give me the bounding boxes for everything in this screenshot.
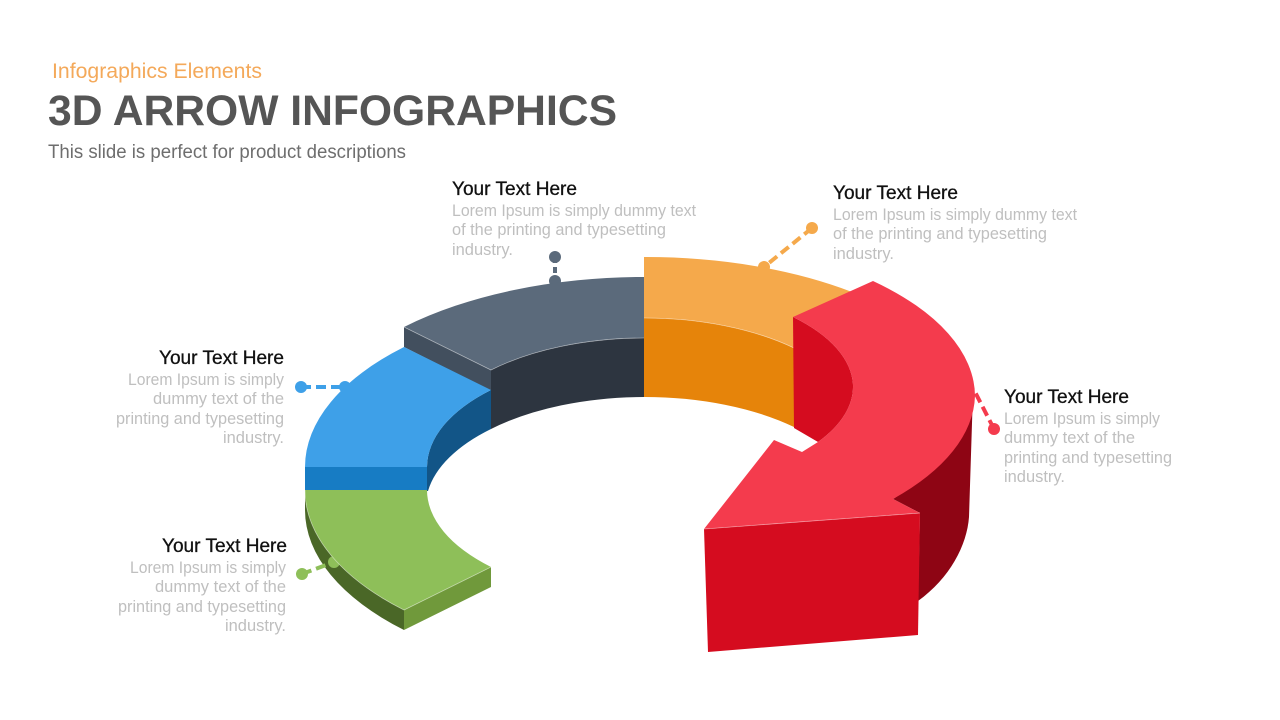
- subtitle: This slide is perfect for product descriptions: [48, 142, 406, 163]
- red inner wall: [793, 317, 853, 442]
- callout: blue: [116, 348, 285, 447]
- callout: green: dummy text of the: [155, 578, 286, 596]
- callout: orange: [833, 183, 1077, 263]
- blue top: [305, 347, 491, 467]
- leader: slate: [549, 251, 561, 287]
- callout: slate: industry.: [452, 241, 513, 259]
- callout: slate: Lorem Ipsum is simply dummy text: [452, 202, 696, 220]
- segment: red arrow: [704, 281, 975, 652]
- callout: blue: Your Text Here: [159, 348, 284, 369]
- header: [48, 60, 617, 163]
- callout: blue: Lorem Ipsum is simply: [128, 371, 285, 389]
- red outer wall: [893, 392, 973, 601]
- slate inner wall: [491, 338, 644, 429]
- callout: blue: printing and typesetting: [116, 410, 284, 428]
- green end face: [404, 567, 491, 630]
- callout: green: Lorem Ipsum is simply: [130, 559, 287, 577]
- segment: blue: [305, 347, 491, 491]
- title: 3D ARROW INFOGRAPHICS: [48, 87, 617, 135]
- callout: slate: Your Text Here: [452, 179, 577, 200]
- orange top: [644, 257, 852, 348]
- red arrow front face: [704, 513, 920, 652]
- callout: green: industry.: [225, 617, 286, 635]
- slate end face: [404, 327, 491, 391]
- callout: orange: Lorem Ipsum is simply dummy text: [833, 206, 1077, 224]
- slate top: [404, 277, 644, 370]
- segment: orange: [644, 257, 852, 427]
- leader: red: [974, 390, 1000, 435]
- callout: red: Your Text Here: [1004, 387, 1129, 408]
- blue front band: [305, 467, 427, 490]
- callout: orange: Your Text Here: [833, 183, 958, 204]
- callout: slate: of the printing and typesetting: [452, 221, 666, 239]
- green top: [305, 490, 491, 610]
- callout: green: Your Text Here: [162, 536, 287, 557]
- segment: green: [296, 490, 491, 630]
- orange inner wall: [644, 318, 794, 427]
- green outer wall: [305, 490, 404, 630]
- eyebrow: Infographics Elements: [52, 60, 262, 83]
- callout: red: Lorem Ipsum is simply: [1004, 410, 1161, 428]
- callout: red: dummy text of the: [1004, 429, 1135, 447]
- segment: slate: [404, 277, 644, 429]
- callout: red: printing and typesetting: [1004, 449, 1172, 467]
- leader: green: [296, 556, 340, 580]
- leader: orange: [758, 222, 818, 273]
- callout: red: [1004, 387, 1172, 486]
- leader: blue: [295, 381, 351, 393]
- callout: blue: dummy text of the: [153, 390, 284, 408]
- blue inner wall: [427, 390, 491, 491]
- callout: green: printing and typesetting: [118, 598, 286, 616]
- red arrow top: [704, 281, 975, 529]
- callout: orange: of the printing and typesetting: [833, 225, 1047, 243]
- callout: red: industry.: [1004, 468, 1065, 486]
- callout: blue: industry.: [223, 429, 284, 447]
- callout: slate: [452, 179, 696, 259]
- callout: orange: industry.: [833, 245, 894, 263]
- callout: green: [118, 536, 287, 635]
